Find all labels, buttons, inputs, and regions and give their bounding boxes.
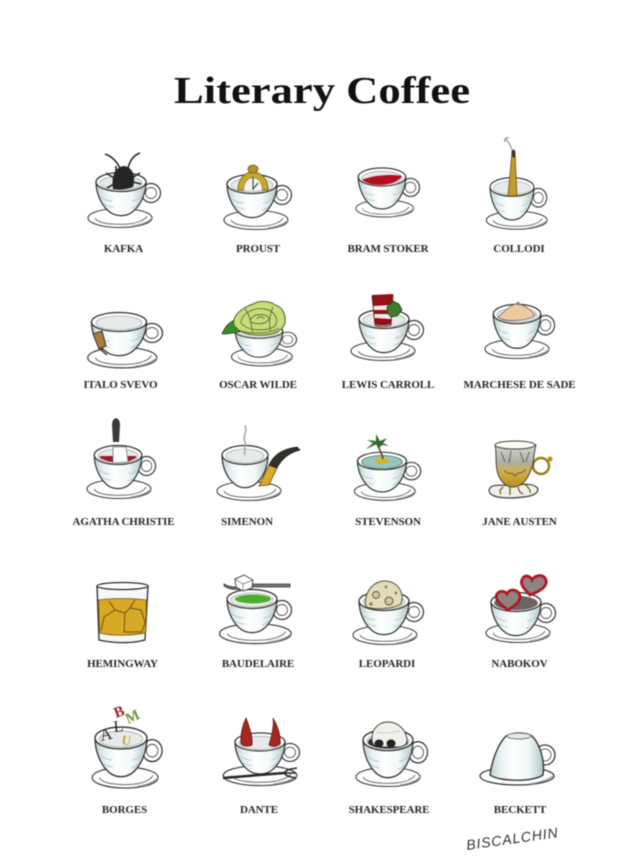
icon: hearts in cup: [486, 576, 556, 642]
icon: cup with pipe and smoke: [217, 425, 300, 500]
title: Literary Coffee: [174, 70, 470, 112]
label: ITALO SVEVO: [84, 379, 158, 391]
label: COLLODI: [493, 243, 545, 255]
tile: Dante: [223, 718, 300, 816]
label: DANTE: [240, 804, 278, 816]
label: BRAM STOKER: [348, 243, 430, 255]
label: MARCHESE DE SADE: [463, 379, 576, 391]
tile: Kafka: [88, 153, 160, 255]
label: LEWIS CARROLL: [342, 379, 434, 391]
label: BECKETT: [494, 804, 547, 816]
label: PROUST: [236, 243, 281, 255]
label: BORGES: [102, 804, 147, 816]
tile: Agatha Christie: [73, 418, 174, 528]
icon: breast in cup: [485, 302, 555, 358]
icon: alphabet letters in cup: B: [112, 703, 127, 722]
tile: Italo Svevo: [84, 312, 162, 391]
tile: Baudelaire: [220, 575, 294, 670]
tile: Beckett: [480, 733, 555, 816]
icon: alphabet letters in cup: U: [120, 732, 133, 749]
icon: knife in cup: [87, 418, 156, 498]
icon: absinthe cup with sugar spoon: [220, 575, 292, 644]
label: SIMENON: [221, 516, 273, 528]
icon: alphabet letters in cup: [92, 703, 162, 788]
label: NABOKOV: [491, 658, 548, 670]
icon: moon in cup: [353, 581, 424, 644]
label: KAFKA: [104, 243, 143, 255]
label: JANE AUSTEN: [482, 516, 557, 528]
icon: mad hatter hat: [351, 294, 424, 360]
tile: Lewis Carroll: [342, 294, 434, 391]
icon: devil horns and trident: [223, 718, 300, 786]
tile: Stevenson: [354, 434, 421, 528]
label: HEMINGWAY: [87, 658, 158, 670]
icon: cup with tea tag: [88, 312, 162, 368]
tile: Jane Austen: [482, 441, 557, 528]
label: AGATHA CHRISTIE: [73, 516, 174, 528]
icon: cup of blood: [356, 168, 420, 217]
tile: Leopardi: [353, 581, 424, 670]
icon: island in cup: [354, 434, 421, 500]
icon: whisky glass: [97, 582, 148, 643]
tile: Proust: [224, 165, 292, 255]
icon: alphabet letters in cup: L: [113, 718, 124, 736]
tile: Marchese de Sade: [463, 302, 576, 391]
icon: alphabet letters in cup: A: [98, 724, 115, 745]
icon: ornate gilded teacup: [489, 441, 552, 498]
signature: BISCALCHIN: [465, 824, 559, 853]
label: SHAKESPEARE: [349, 804, 429, 816]
icon: cockroach in cup: [88, 153, 160, 228]
icon: upside-down cup: [480, 733, 555, 785]
label: OSCAR WILDE: [219, 379, 297, 391]
tile: Shakespeare: [349, 722, 429, 816]
tile: Collodi: [486, 138, 547, 255]
label: BAUDELAIRE: [222, 658, 294, 670]
tile: Borges: [92, 703, 162, 816]
tile: Hemingway: [87, 582, 158, 670]
label: STEVENSON: [355, 516, 421, 528]
label: LEOPARDI: [359, 658, 415, 670]
tile: Bram Stoker: [348, 168, 430, 255]
icon: alphabet letters in cup: M: [123, 707, 143, 728]
icon: Pinocchio nose: [486, 138, 547, 229]
icon: pocket watch in cup: [224, 165, 292, 230]
tile: Nabokov: [486, 576, 556, 670]
icon: skull in cup: [356, 722, 428, 786]
tile: Simenon: [217, 425, 300, 528]
icon: green carnation: [222, 301, 297, 366]
tile: Oscar Wilde: [219, 301, 297, 391]
